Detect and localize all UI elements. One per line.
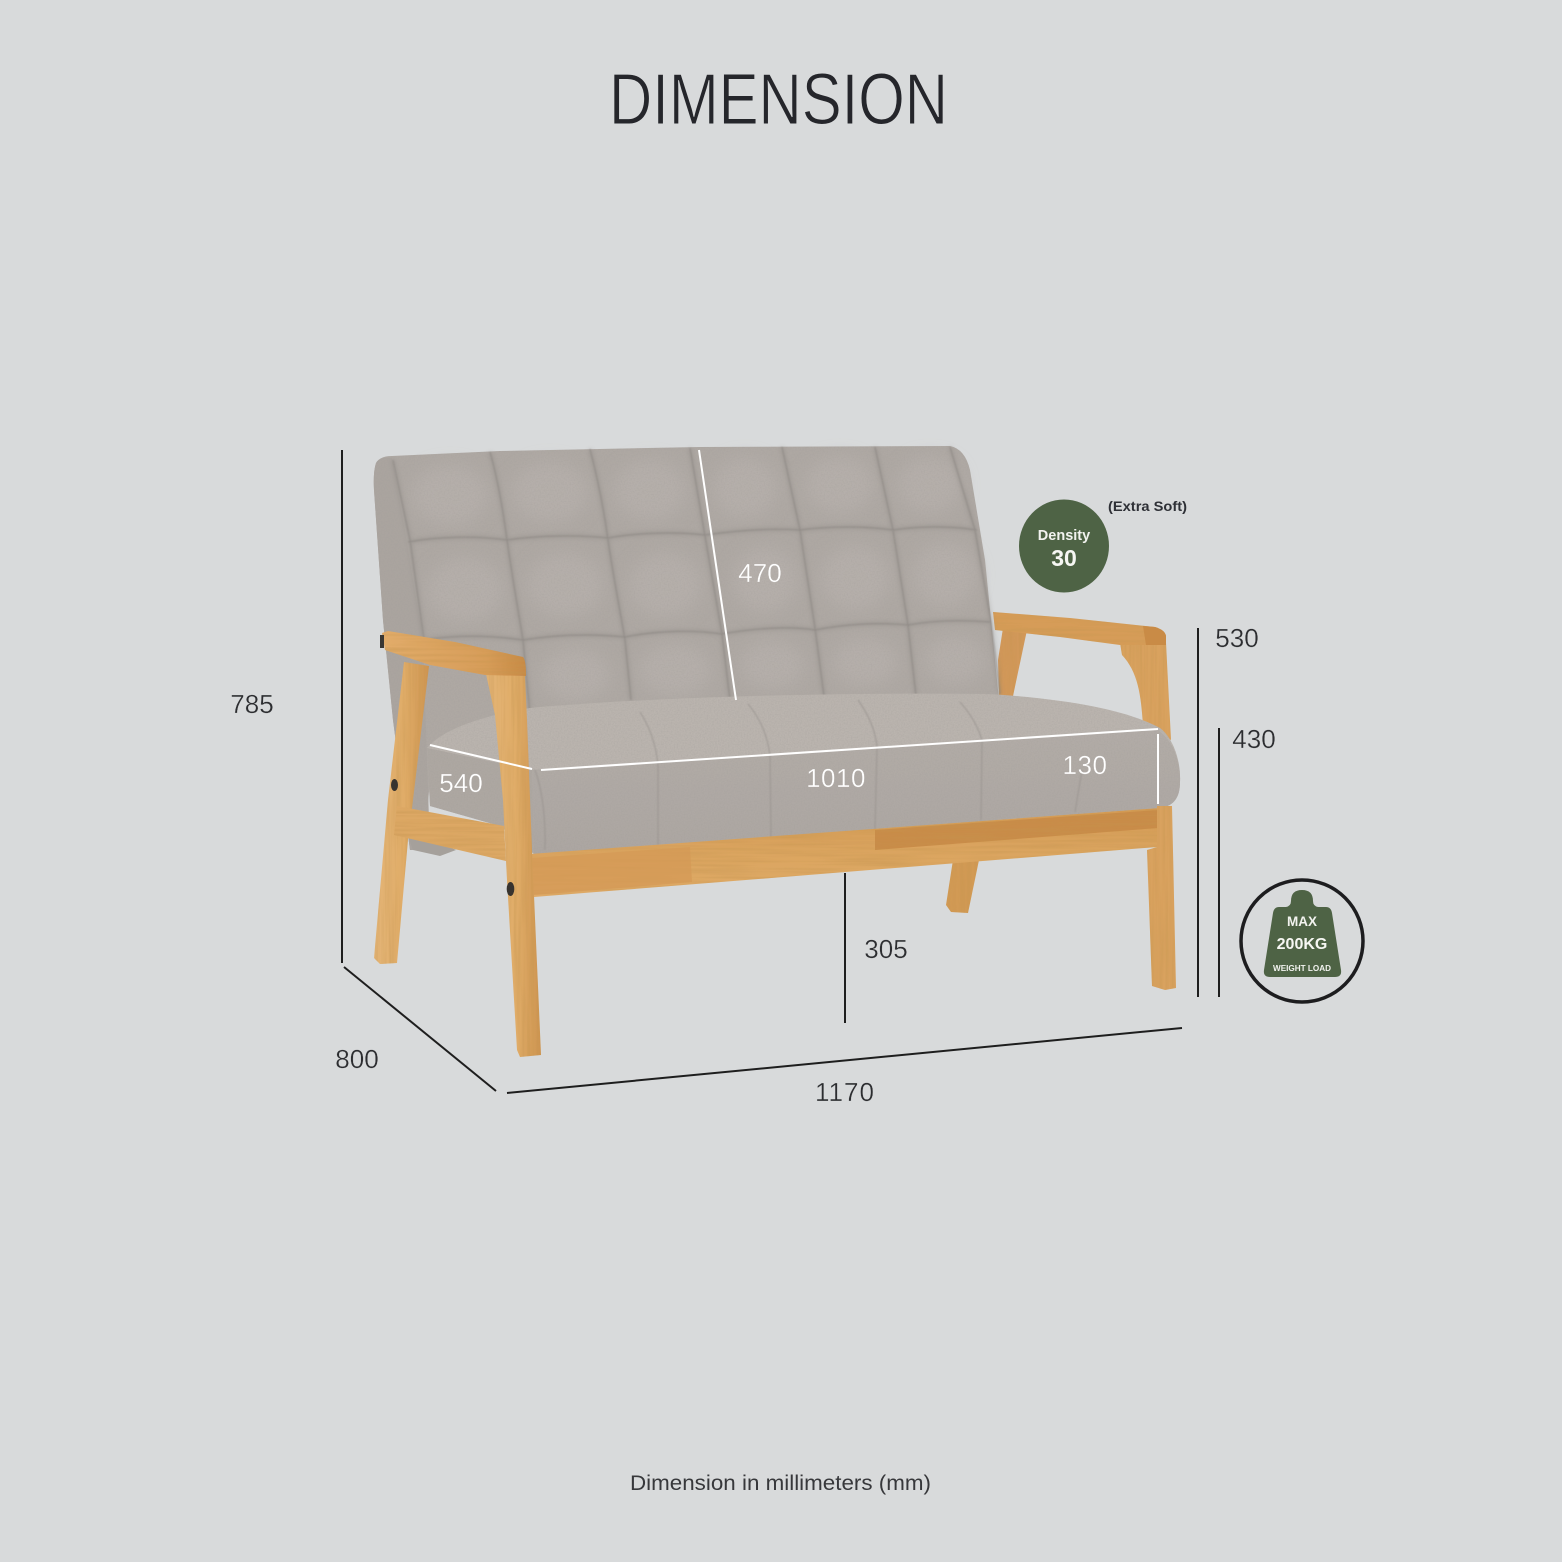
title: DIMENSION bbox=[609, 60, 948, 140]
density badge bbox=[1019, 500, 1109, 592]
right front leg bbox=[1147, 806, 1176, 990]
white dimension lines on sofa bbox=[430, 450, 1158, 804]
rear right arm post bbox=[998, 628, 1027, 696]
back height: 470 bbox=[738, 558, 782, 588]
labels on sofa bbox=[439, 558, 1107, 798]
tuft highlights bbox=[412, 457, 985, 701]
seat depth: 540 bbox=[439, 768, 483, 798]
arm height: 530 bbox=[1215, 623, 1259, 653]
left side rail bbox=[394, 806, 506, 861]
weight text: weight load: WEIGHT LOAD bbox=[1273, 963, 1331, 973]
density label: Density bbox=[1038, 528, 1090, 544]
left rear leg bbox=[374, 662, 429, 964]
rear right leg bbox=[946, 860, 979, 913]
density note: (Extra Soft) bbox=[1108, 498, 1187, 514]
seat width: 1010 bbox=[806, 763, 866, 793]
clearance: 305 bbox=[864, 934, 908, 964]
icon: weight bbox=[1264, 890, 1341, 977]
weight text: 200kg: 200KG bbox=[1277, 936, 1327, 953]
fabric texture bbox=[374, 446, 1003, 850]
sofa backrest bbox=[374, 446, 1003, 850]
black dimension lines bbox=[342, 450, 1219, 1093]
left front post bbox=[486, 674, 541, 1057]
tuft seams soft shadow bbox=[393, 447, 1000, 715]
sofa illustration bbox=[374, 446, 1180, 1057]
seat seams bbox=[535, 700, 1082, 850]
footnote: Dimension in millimeters (mm) bbox=[630, 1472, 931, 1495]
right front post upper bbox=[1120, 643, 1171, 740]
seat front face bbox=[532, 730, 1180, 854]
bolts bbox=[391, 779, 514, 896]
seat cushion bbox=[427, 694, 1180, 854]
front rail bbox=[530, 808, 1160, 897]
depth: 800 bbox=[335, 1044, 379, 1074]
dimension labels bbox=[230, 623, 1276, 1107]
overall height: 785 bbox=[230, 689, 274, 719]
weight text: max: MAX bbox=[1287, 914, 1317, 929]
backrest side panel bbox=[374, 458, 430, 850]
cushion thickness: 130 bbox=[1063, 750, 1107, 780]
bottom fabric flap bbox=[408, 836, 456, 856]
density value: 30 bbox=[1051, 545, 1077, 571]
seat height: 430 bbox=[1232, 724, 1276, 754]
width: 1170 bbox=[815, 1077, 875, 1107]
tuft seams lines bbox=[393, 447, 1000, 715]
right arm bbox=[993, 612, 1166, 645]
seat left side face bbox=[427, 748, 534, 854]
weight load badge bbox=[1241, 880, 1363, 1002]
left arm bbox=[380, 631, 526, 676]
